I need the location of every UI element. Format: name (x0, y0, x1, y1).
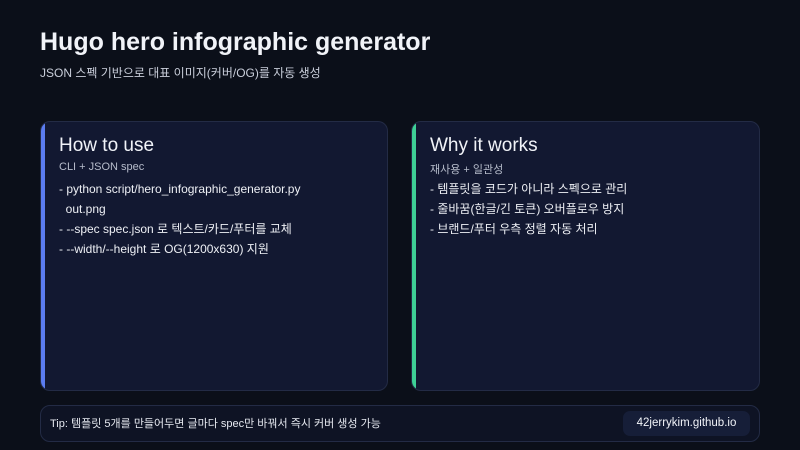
bullet list: - 줄바꿈(한글/긴 토큰) 오버플로우 방지 (430, 202, 624, 216)
brand badge (623, 411, 750, 436)
heading: how to use: How to use (59, 135, 154, 156)
bullet list: out.png (66, 202, 106, 216)
bullet list: - 브랜드/푸터 우측 정렬 자동 처리 (430, 222, 598, 236)
bullet list: - python script/hero_infographic_generator.py (59, 182, 300, 196)
bullet list: - --width/--height 로 OG(1200x630) 지원 (59, 242, 269, 256)
panel: how to use (40, 121, 388, 391)
tip text: Tip: 템플릿 5개를 만들어두면 글마다 spec만 바꿔서 즉시 커버 생성 가능 (50, 418, 381, 430)
bullet list: - 템플릿을 코드가 아니라 스펙으로 관리 (430, 182, 627, 196)
brand badge: 42jerrykim.github.io (637, 417, 736, 429)
subheading: CLI + JSON spec (59, 161, 144, 173)
subtitle: JSON 스펙 기반으로 대표 이미지(커버/OG)를 자동 생성 (40, 66, 321, 80)
heading: why it works: Why it works (430, 135, 538, 156)
panel: why it works (411, 121, 760, 391)
bullet list: - --spec spec.json 로 텍스트/카드/푸터를 교체 (59, 222, 292, 236)
subheading: 재사용 + 일관성 (430, 164, 503, 176)
title: Hugo hero infographic generator (40, 28, 430, 56)
bullet list (59, 182, 300, 256)
footer (40, 405, 760, 442)
bullet list (430, 182, 627, 236)
